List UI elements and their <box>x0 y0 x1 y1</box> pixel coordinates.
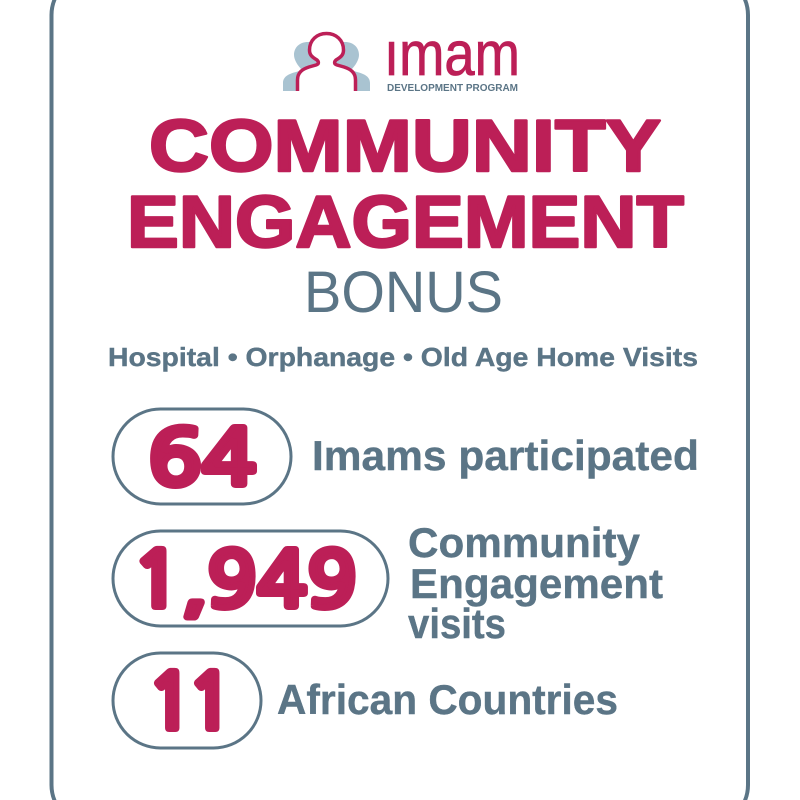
logo <box>283 20 520 94</box>
label: Imams participated <box>312 432 699 479</box>
wordmark: ımam <box>384 20 520 89</box>
number: 1 <box>147 666 194 741</box>
number: 64 <box>148 422 256 497</box>
stat: community engagement visits <box>113 519 663 647</box>
title: COMMUNITY <box>149 106 661 187</box>
program name: DEVELOPMENT PROGRAM <box>387 82 518 94</box>
label: Community <box>408 519 641 566</box>
label: African Countries <box>277 676 618 723</box>
stat: african countries <box>113 653 618 748</box>
pill <box>113 409 291 504</box>
title <box>127 106 684 263</box>
pill <box>113 531 388 626</box>
label <box>408 519 663 647</box>
title: ENGAGEMENT <box>127 182 684 263</box>
pill <box>113 653 261 748</box>
number: 1,949 <box>132 544 357 619</box>
subtitle: bonus: BONUS <box>304 260 503 325</box>
text: visit types: Hospital • Orphanage • Old Age Home Visits <box>108 342 698 372</box>
label: Engagement <box>410 560 663 607</box>
number: 1 <box>187 666 234 741</box>
label: visits <box>408 600 506 647</box>
icon: people <box>283 34 370 91</box>
stat: imams participated <box>113 409 699 504</box>
